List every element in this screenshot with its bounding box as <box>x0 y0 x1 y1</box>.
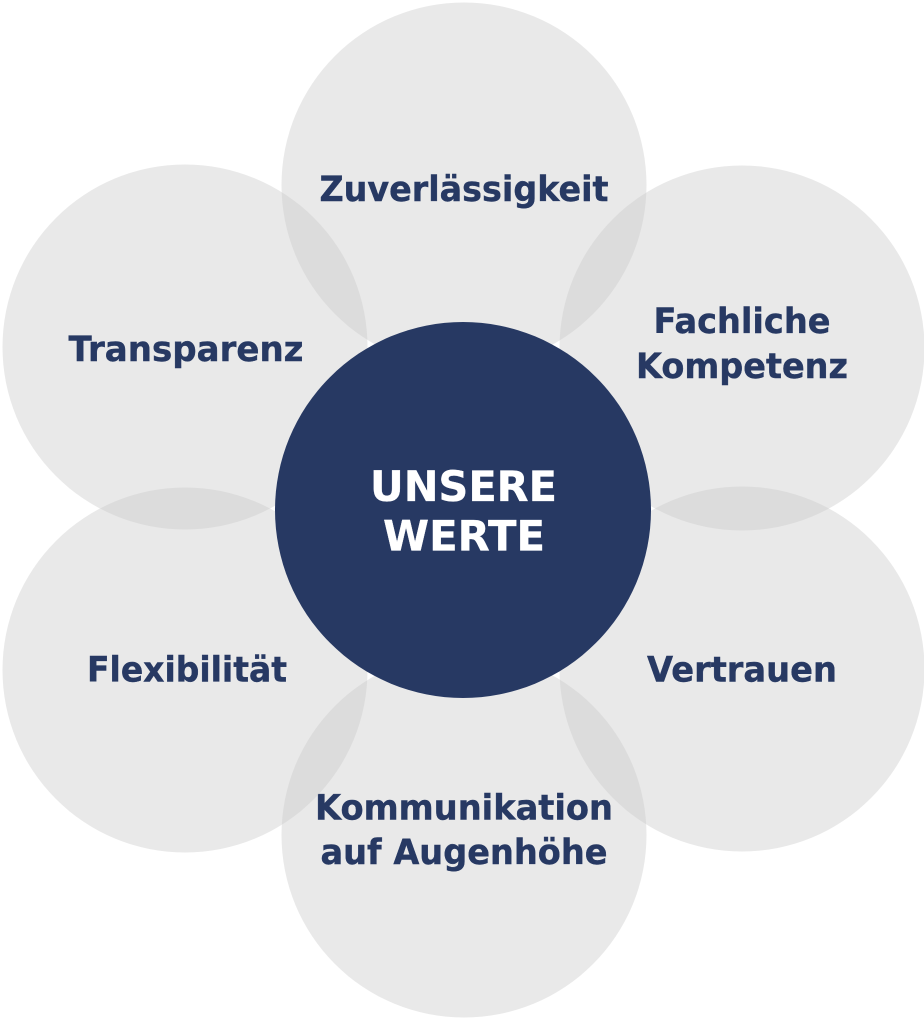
petal: Vertrauen <box>560 486 924 852</box>
petal: Kommunikation auf Augenhöhe: auf Augenhöhe <box>320 833 608 873</box>
petal: Flexibilität: Flexibilität <box>87 650 287 690</box>
petal: Fachliche Kompetenz <box>560 166 924 530</box>
petal: Zuverlässigkeit <box>282 2 646 368</box>
petal: Zuverlässigkeit: Zuverlässigkeit <box>320 170 608 210</box>
petal: Flexibilität <box>2 488 368 852</box>
petal: Transparenz <box>2 164 368 530</box>
petal: Fachliche Kompetenz: Fachliche <box>654 302 830 342</box>
petal: Kommunikation auf Augenhöhe <box>282 652 646 1018</box>
center circle: Unsere Werte: UNSERE <box>370 462 557 511</box>
petal: Fachliche Kompetenz: Kompetenz <box>636 347 848 387</box>
petal: Kommunikation auf Augenhöhe: Kommunikation <box>315 788 613 828</box>
petal: Vertrauen: Vertrauen <box>647 650 837 690</box>
petal: Transparenz: Transparenz <box>68 330 304 370</box>
center circle: Unsere Werte <box>275 322 651 698</box>
center circle: Unsere Werte: WERTE <box>383 512 545 560</box>
